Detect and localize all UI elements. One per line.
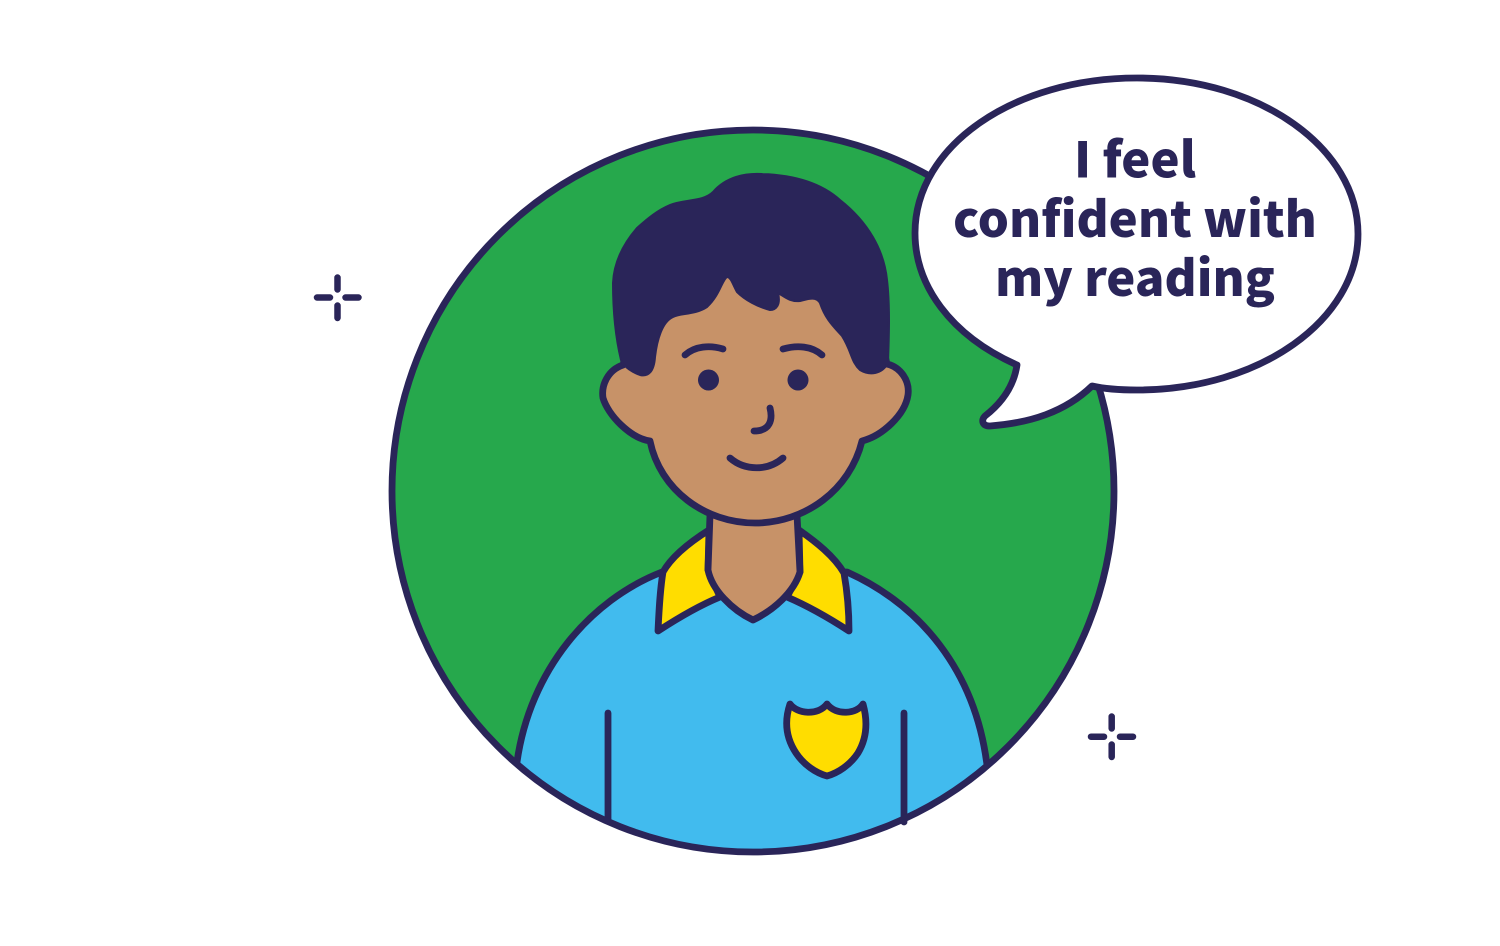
green circle background [392, 130, 1114, 852]
head and ears [603, 250, 908, 523]
sparkle right [1091, 716, 1133, 757]
right eyebrow [783, 347, 822, 355]
circle outline [392, 130, 1114, 852]
bubble text [953, 122, 1317, 311]
speech bubble [915, 78, 1358, 426]
left eye [698, 370, 719, 390]
bubble text: confident with [953, 181, 1317, 252]
shirt [517, 572, 987, 880]
hair [613, 174, 889, 375]
bubble text: I feel [1074, 122, 1196, 192]
shirt right sleeve line [901, 713, 907, 822]
nose [754, 408, 771, 431]
collar left [658, 530, 720, 631]
boy figure [517, 174, 987, 880]
right eye [788, 370, 808, 390]
collar right [787, 530, 849, 631]
bubble shape [915, 78, 1358, 426]
sparkle left [317, 278, 358, 318]
shirt left sleeve line [605, 713, 611, 821]
bubble text: my reading [995, 240, 1275, 311]
badge [787, 704, 866, 776]
smile [730, 458, 783, 468]
left eyebrow [685, 347, 723, 355]
neck [708, 515, 800, 620]
illustration: confident reader [314, 74, 1362, 856]
